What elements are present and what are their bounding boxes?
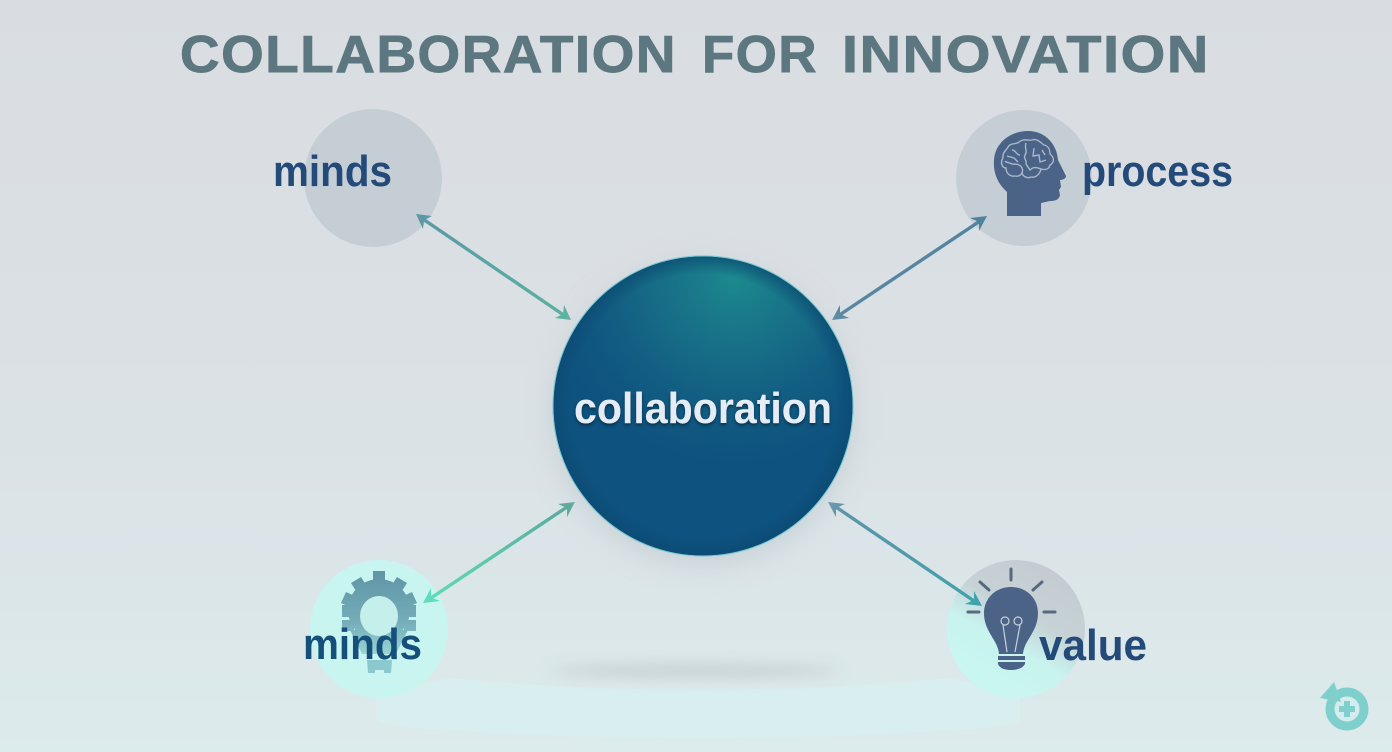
title: COLLABORATION <box>180 26 677 84</box>
title <box>180 26 1210 84</box>
podium base <box>377 678 1020 738</box>
icon: gear <box>341 571 417 673</box>
icon: head with brain <box>994 131 1066 216</box>
logo: corner badge <box>1320 682 1364 726</box>
label: minds bottom-left: minds <box>303 620 422 669</box>
circle: value <box>947 560 1085 698</box>
label: value: value <box>1039 621 1147 670</box>
label: process: process <box>1082 147 1233 196</box>
title: INNOVATION <box>842 26 1210 84</box>
podium shadow <box>550 664 840 678</box>
arrow: minds bottom to collaboration <box>423 502 575 603</box>
node: value bottom-right <box>947 560 1147 698</box>
circle: minds bottom-left <box>310 560 448 698</box>
central circle: collaboration <box>553 256 853 556</box>
node: minds bottom-left <box>303 560 448 698</box>
icon: light bulb <box>968 569 1055 670</box>
node: minds top-left <box>273 109 442 247</box>
circle: minds top-left <box>304 109 442 247</box>
arrow: process to collaboration <box>832 216 987 320</box>
label: collaboration: collaboration <box>574 384 832 433</box>
arrow: minds to collaboration <box>416 214 571 320</box>
arrow: value to collaboration <box>828 502 982 606</box>
label: minds top-left: minds <box>273 147 392 196</box>
title: FOR <box>702 26 818 84</box>
sphere shadow <box>553 264 853 564</box>
circle: process <box>956 110 1092 246</box>
node: process top-right <box>956 110 1233 246</box>
